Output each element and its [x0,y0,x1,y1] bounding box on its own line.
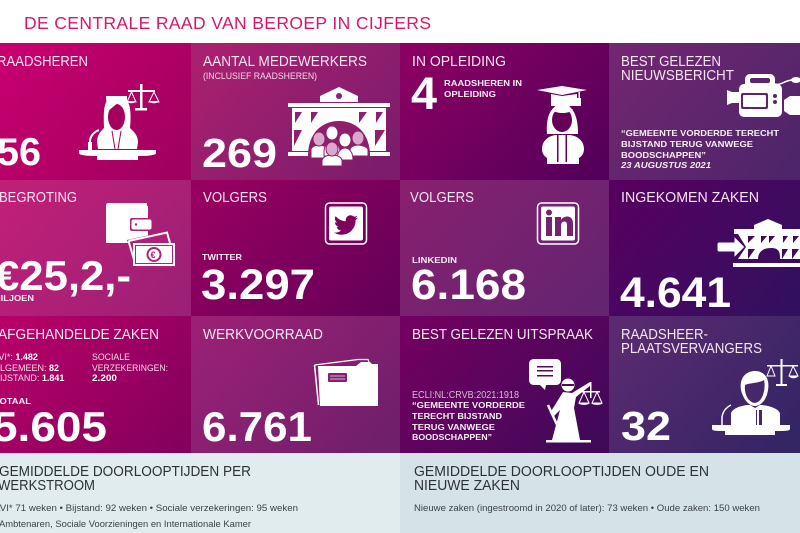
text: doorlooptijden per werkstroom: AVI* 71 weken • Bijstand: 92 weken • Sociale verzekeringen: 95 weken [0,503,298,514]
quote: nieuwsbericht: BOODSCHAPPEN” [621,150,706,160]
icon: graduate [537,86,587,164]
panel: doorlooptijden oude en nieuwe zaken: NIEUWE ZAKEN [414,477,520,494]
heading: aantal medewerkers: AANTAL MEDEWERKERS [203,53,367,70]
quote: uitspraak: TERECHT BIJSTAND [412,411,502,421]
quote: nieuwsbericht [620,128,780,170]
panel: begroting [0,180,191,316]
panel: raadsheren [0,43,191,180]
heading: best gelezen uitspraak: BEST GELEZEN UITSPRAAK [412,326,593,343]
panel: best gelezen nieuwsbericht [609,43,800,180]
panel: afgehandelde zaken [0,316,191,453]
icon: courthouse with people [288,87,390,166]
label: twitter: TWITTER [202,252,242,262]
icon: twitter [326,203,366,244]
quote: nieuwsbericht: BIJSTAND TERUG VANWEGE [621,139,753,149]
number: 6.168: 6.168 [411,261,526,309]
panel: in opleiding [400,43,609,180]
icon: wallet and money [106,203,176,268]
heading: in opleiding: IN OPLEIDING [412,53,506,70]
panel: volgers twitter [191,180,400,316]
case reference: ECLI:NL:CRVB:2021:1918 [412,390,519,401]
panel: best gelezen uitspraak [400,316,609,453]
number: 32: 32 [621,403,671,449]
heading: doorlooptijden oude en nieuwe zaken: GEMIDDELDE DOORLOOPTIJDEN OUDE EN [414,463,709,480]
heading: werkvoorraad: WERKVOORRAAD [203,326,323,343]
heading: raadsheren: RAADSHEREN [0,53,88,70]
icon: male judge with scales [712,359,798,435]
quote: nieuwsbericht: “GEMEENTE VORDERDE TERECHT [621,128,780,138]
icon: folder [314,360,378,406]
icon: female judge with scales [79,84,159,160]
heading: begroting: BEGROTING [0,189,77,206]
label: raadsheren in opleiding: RAADSHEREN IN [444,78,522,88]
heading: doorlooptijden per werkstroom: GEMIDDELDE DOORLOOPTIJDEN PER [0,463,251,480]
breakdown: case types: 2.200 [92,373,117,383]
quote: uitspraak [412,400,525,442]
panel: raadsheer-plaatsvervangers: PLAATSVERVANGERS [621,340,762,357]
panel: ingekomen zaken [609,180,800,317]
panel: aantal medewerkers [191,43,400,180]
icon: lady justice with speech bubble [529,359,602,442]
number: 6.761: 6.761 [202,403,312,450]
number: 4: 4 [411,68,437,119]
quote: uitspraak: TERUG VANWEGE [412,422,495,432]
number: 3.297: 3.297 [201,261,315,309]
panel: raadsheer-plaatsvervangers [609,316,800,453]
heading: volgers: VOLGERS [410,189,474,206]
heading: raadsheer-plaatsvervangers: RAADSHEER- [621,326,708,343]
breakdown: case types: VERZEKERINGEN: [92,363,168,373]
icon: video camera [727,74,800,117]
quote: nieuwsbericht: 23 AUGUSTUS 2021 [620,160,711,170]
label: linkedin: LINKEDIN [412,255,457,265]
panel: doorlooptijden per werkstroom: WERKSTROOM [0,477,95,494]
text: oude en nieuwe zaken: Nieuwe zaken (ingestroomd in 2020 of later): 73 weken • Oude zaken: 150 weken [414,503,760,514]
heading: ingekomen zaken: INGEKOMEN ZAKEN [621,189,759,206]
icon: arrow into courthouse [717,219,800,267]
panel: doorlooptijden per werkstroom: Ambtenaren, Sociale Voorzieningen en Internationale Kamer [0,519,251,530]
subheading: (INCLUSIEF RAADSHEREN) [203,71,317,82]
panel: best gelezen nieuwsbericht: NIEUWSBERICHT [621,67,734,84]
panel: in opleiding: OPLEIDING [444,89,496,99]
heading: best gelezen nieuwsbericht: BEST GELEZEN [621,53,721,70]
number: 4.641: 4.641 [620,269,731,317]
heading: afgehandelde zaken: AFGEHANDELDE ZAKEN [0,326,159,343]
breakdown: case types: SOCIALE [92,352,130,362]
title: DE CENTRALE RAAD VAN BEROEP IN CIJFERS [24,13,431,33]
icon: wallet and money: € [150,250,156,260]
panel: doorlooptijden oude en nieuwe zaken [400,453,800,533]
panel: volgers linkedin [400,180,609,316]
breakdown: case types [0,352,168,383]
number: 269: 269 [202,130,277,176]
quote: uitspraak: BOODSCHAPPEN” [412,432,492,442]
heading: volgers: VOLGERS [203,189,267,206]
panel: werkvoorraad [191,316,400,453]
icon: linkedin [538,203,578,244]
quote: uitspraak: “GEMEENTE VORDERDE [412,400,525,410]
panel: doorlooptijden per werkstroom [0,453,400,533]
